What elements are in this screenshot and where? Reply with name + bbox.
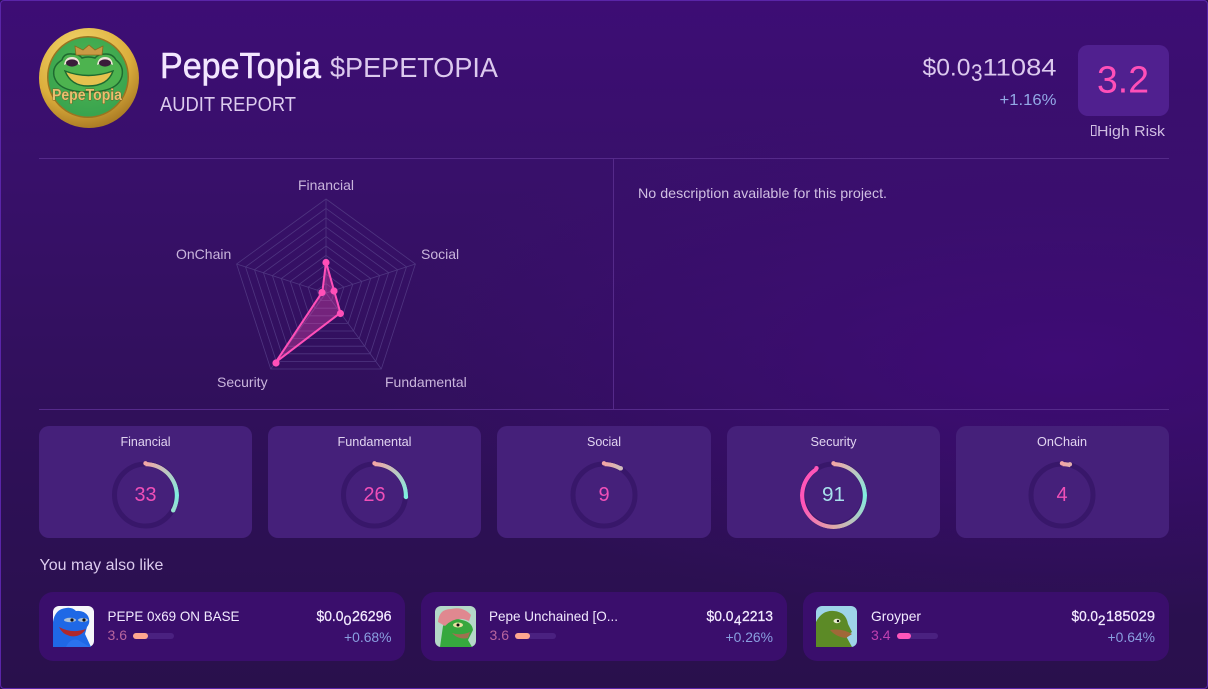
panel: Social score: 9 [598,484,610,506]
score bar [515,633,556,639]
radar axis labels: Fundamental [385,374,467,390]
icon: PepeTopia logo: PepeTopia [52,87,122,104]
header [39,28,1169,140]
panel: OnChain score: OnChain [1037,434,1087,449]
score box [1078,45,1169,116]
card: PEPE 0x69 ON BASE: 26296 [352,609,392,625]
panel: Social score: Social [587,434,621,449]
card: PEPE 0x69 ON BASE: $0.0 [316,609,344,625]
panel: Fundamental score [268,426,481,538]
radar axis labels: Social [421,246,459,262]
icon: blue pepe [53,606,94,647]
card: Groyper: $0.0 [1072,609,1098,625]
ticker: $PEPETOPIA [330,52,498,83]
panel: Financial score: Financial [120,434,171,449]
project name: PepeTopia [160,45,322,86]
card: Groyper: 185029 [1106,609,1155,625]
panel: Security score: Security [810,434,857,449]
score bar [133,633,174,639]
card: Groyper: 3.4 [871,627,891,643]
card: PEPE 0x69 ON BASE: 0 [344,612,352,628]
panel: Financial score [39,426,252,538]
card: Pepe Unchained: +0.26% [726,629,773,645]
panel: Fundamental score: Fundamental [338,434,412,449]
risk label: High Risk [1097,123,1166,140]
score bar [897,633,938,639]
description: No description available for this project. [638,185,887,201]
section heading: You may also like [40,557,164,574]
radar axis labels: OnChain [176,246,231,262]
card: Pepe Unchained: 3.6 [490,627,509,643]
radar chart [176,177,467,390]
price: $0.0 [922,54,970,82]
card: Pepe Unchained: Pepe Unchained [O... [489,608,618,624]
card: PEPE 0x69 ON BASE [39,592,405,661]
icon: PepeTopia logo [39,28,139,128]
price [922,54,1056,87]
card: Pepe Unchained: $0.0 [706,609,734,625]
radar axis labels [176,177,467,390]
panel: OnChain score [956,426,1169,538]
price: 11084 [982,54,1056,82]
panel: Financial score: 33 [134,484,156,506]
price: 3 [971,60,982,87]
card: Groyper [803,592,1169,661]
card: Groyper: +0.64% [1108,629,1155,645]
radar data polygon [272,259,344,367]
card: Pepe Unchained: 2213 [742,609,773,625]
card: Pepe Unchained [421,592,787,661]
card: Groyper: 2 [1098,612,1106,628]
card: Pepe Unchained: 4 [734,612,742,628]
radar axis labels: Security [217,374,268,390]
radar axis labels: Financial [298,177,354,193]
card: Groyper: Groyper [871,608,921,624]
score box: 3.2 [1097,60,1149,102]
card: PEPE 0x69 ON BASE: PEPE 0x69 ON BASE [108,608,240,624]
panel: Security score: 91 [822,484,845,506]
panel: Security score [727,426,940,538]
panel: OnChain score: 4 [1056,484,1068,506]
subtitle: AUDIT REPORT [160,94,296,116]
icon: pepe with brain [435,606,476,647]
price change: +1.16% [1000,92,1056,109]
card: PEPE 0x69 ON BASE: 3.6 [108,627,127,643]
panel: Social score [497,426,711,538]
icon: groyper [816,606,857,647]
panel: Fundamental score: 26 [364,484,386,506]
card: PEPE 0x69 ON BASE: +0.68% [344,629,392,645]
